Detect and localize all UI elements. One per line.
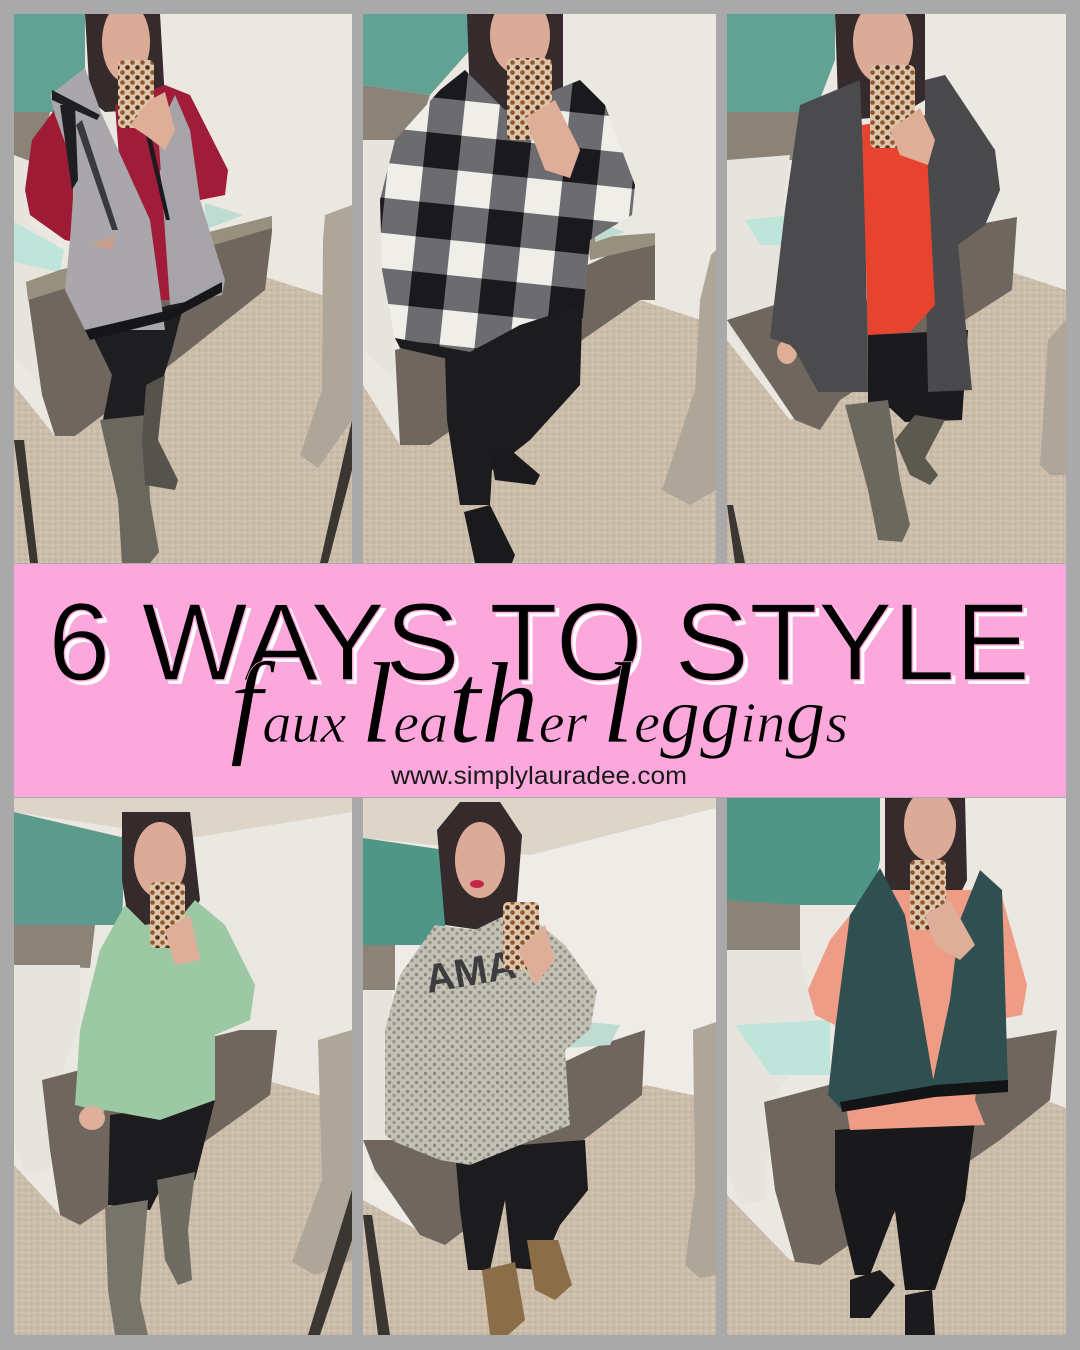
panel: outfit 5, leopard sweatshirt: AMA: [422, 943, 519, 1002]
subtitle: faux leather leggings: faux leath er legg ings: [230, 640, 848, 767]
panel: pink title band: [14, 564, 1066, 797]
title: 6 ways to style: 6 WAYS TO STYLE: [48, 581, 1030, 704]
title shadow: 6 ways to style: 6 WAYS TO STYLE: [52, 585, 1034, 708]
website url: www.simplylauradee.com: [390, 762, 687, 790]
panel: outfit 5, leopard sweatshirt: [363, 798, 716, 1335]
panel: outfit 2, buffalo plaid fleece: [363, 14, 716, 563]
panel: outfit 4, mint sweater: [14, 798, 352, 1335]
panel: outfit 6, green puffer vest with coral tunic: [727, 798, 1066, 1335]
panel: outfit 3, charcoal cardigan with red top: [727, 14, 1066, 563]
panel: outfit 1, grey puffer vest with red top: [14, 14, 352, 563]
